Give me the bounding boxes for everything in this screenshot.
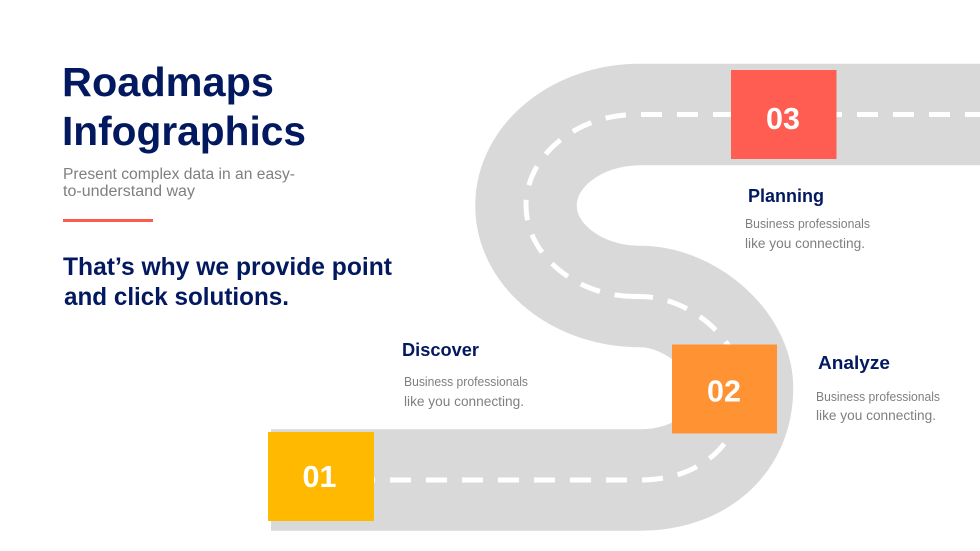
subtitle [63, 166, 295, 200]
label: analyze: like you connecting. [816, 408, 936, 423]
milestone 02: 02 [707, 374, 741, 408]
label: discover: Business professionals [404, 374, 528, 389]
title: Infographics [62, 108, 306, 154]
milestone 01: 01 [303, 460, 336, 494]
subtitle: Present complex data in an easy- [63, 166, 295, 183]
label: analyze [816, 352, 940, 423]
tagline [63, 253, 393, 311]
road [271, 114, 980, 480]
label: planning [745, 185, 870, 251]
milestone 03 [731, 70, 836, 159]
label: analyze: Business professionals [816, 389, 940, 404]
label: analyze: Analyze [818, 352, 890, 373]
tagline: That’s why we provide point [63, 253, 393, 281]
milestone 03: 03 [766, 102, 800, 136]
subtitle: to-understand way [63, 183, 195, 200]
milestone 02 [672, 344, 777, 434]
accent divider [63, 219, 153, 222]
label: planning: Business professionals [745, 216, 870, 231]
tagline: and click solutions. [64, 283, 289, 311]
milestone 01 [268, 432, 374, 521]
label: planning: Planning [748, 185, 824, 206]
title [62, 59, 306, 154]
label: planning: like you connecting. [745, 236, 865, 251]
label: discover: Discover [402, 339, 479, 360]
title: Roadmaps [62, 59, 274, 105]
label: discover: like you connecting. [404, 394, 524, 409]
label: discover [402, 339, 528, 409]
